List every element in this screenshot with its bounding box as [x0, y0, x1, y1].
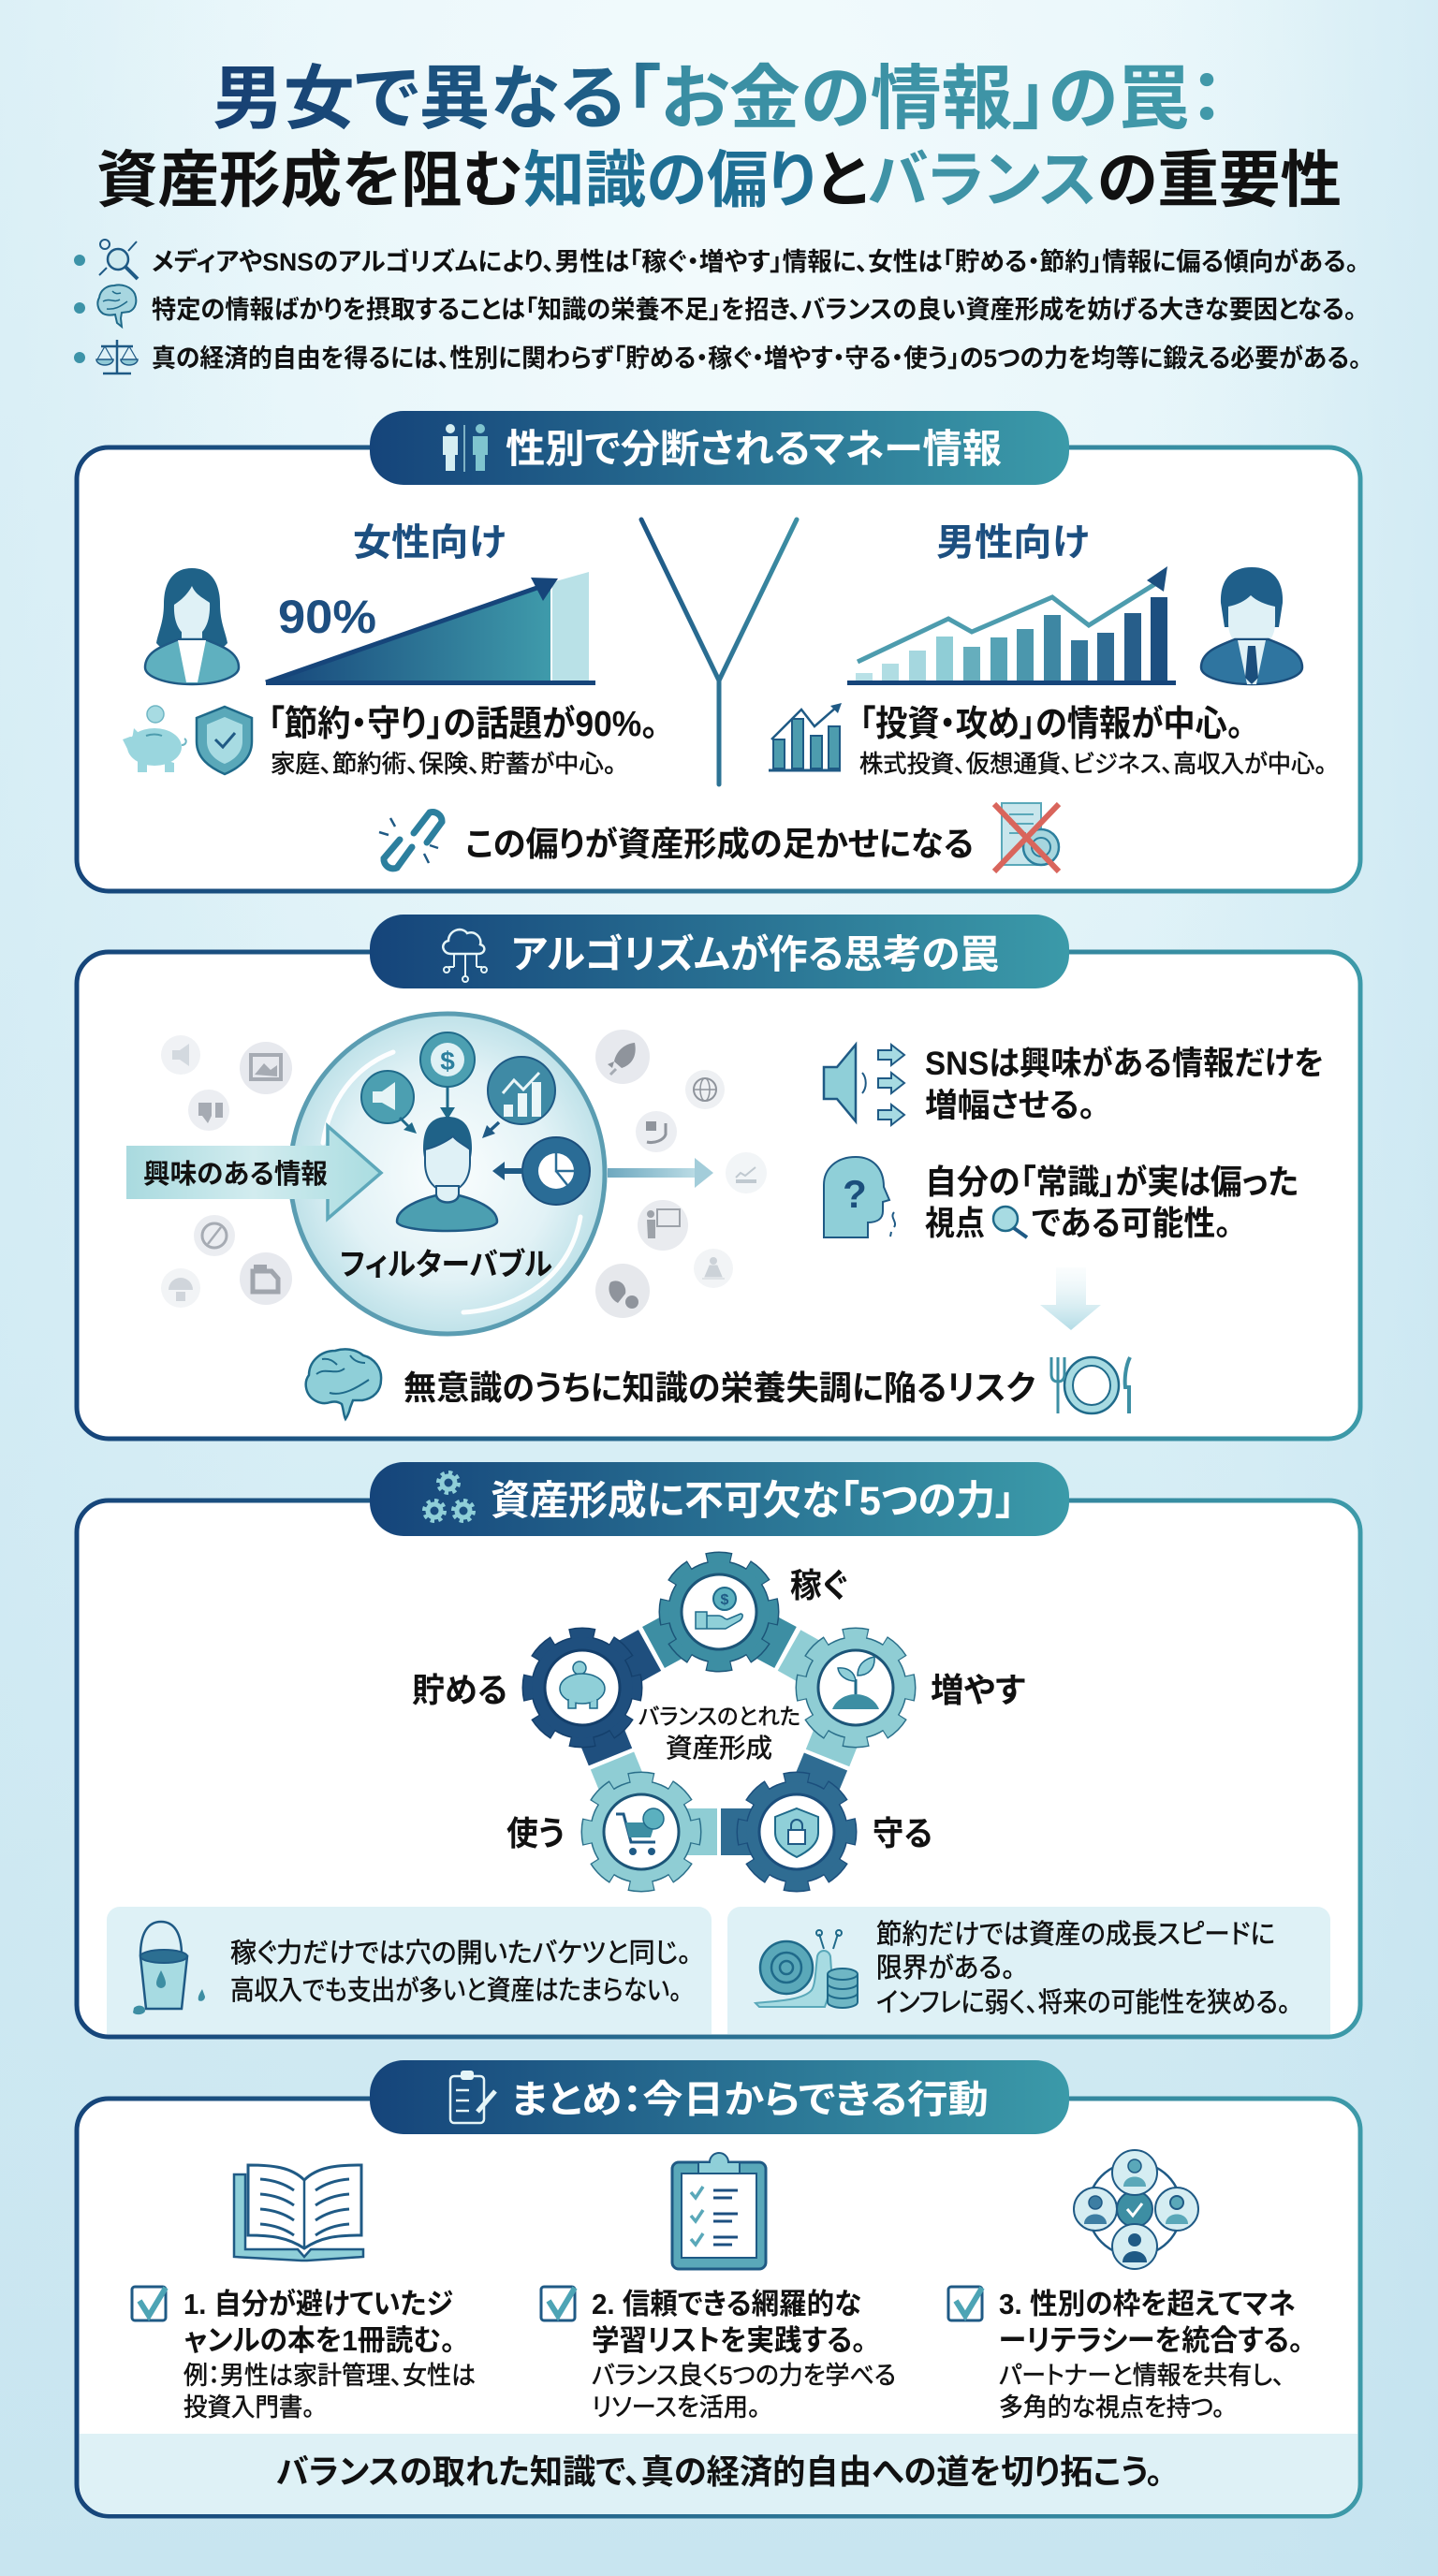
panel frame — [77, 447, 1360, 891]
title: 資産形成を阻む知識の偏りとバランスの重要性 — [96, 145, 1342, 214]
text: your common sense may be biased: 視点 — [925, 1204, 985, 1242]
icon: head with question mark: ? — [843, 1172, 867, 1216]
gear: earn: $ — [721, 1592, 729, 1608]
filter bubble — [126, 1014, 605, 1334]
gear connectors — [582, 1612, 856, 1832]
action 3: 多角的な視点を持つ。 — [999, 2393, 1225, 2422]
icon: snail with coins — [756, 1930, 858, 2008]
panel: algorithm thought trap — [77, 915, 1360, 1439]
section heading pill — [370, 915, 1069, 988]
label: protect: 守る — [873, 1814, 932, 1852]
arrow: interesting information in — [126, 1126, 381, 1219]
text: women headline and detail: 「節約・守り」の話題が90%。 — [268, 705, 658, 744]
section heading pill: アルゴリズムが作る思考の罠 — [511, 932, 999, 976]
text: SNS amplifies interests — [925, 1046, 1324, 1124]
callout: bias as shackle: この偏りが資産形成の足かせになる — [465, 825, 974, 863]
icon: head with question mark — [824, 1157, 895, 1237]
diagram: five interlocking gears — [412, 1559, 1025, 1884]
icon: leaky bucket — [133, 1922, 205, 2014]
icon: magnifier inline — [993, 1207, 1027, 1237]
band: closing message — [80, 2434, 1357, 2514]
icon: person in bubble — [397, 1117, 497, 1231]
icon: shield with check — [197, 707, 252, 774]
Y-shaped divider — [641, 520, 797, 784]
text: women headline and detail: 家庭、節約術、保険、貯蓄が中心。 — [271, 750, 616, 778]
icon: money bubble — [420, 1032, 475, 1120]
callout: risk of knowledge malnutrition: 無意識のうちに知識の栄養失調に陥るリスク — [404, 1368, 1035, 1407]
gear: grow — [803, 1635, 908, 1740]
section heading pill — [370, 2060, 1069, 2134]
gear: spend — [589, 1779, 694, 1884]
label: spend: 使う — [506, 1814, 565, 1852]
icon: plate and cutlery — [1051, 1357, 1130, 1413]
text: men headline and detail: 株式投資、仮想通貨、ビジネス、高収入が中心。 — [859, 750, 1327, 778]
band: closing message: バランスの取れた知識で、真の経済的自由への道を切り拓こう。 — [276, 2452, 1163, 2491]
action 2: 学習リストを実践する。 — [592, 2324, 866, 2357]
action 2: 2. 信頼できる網羅的な — [592, 2288, 861, 2320]
section heading pill: 性別で分断されるマネー情報 — [506, 427, 1002, 471]
section heading pill — [370, 1462, 1069, 1536]
text: your common sense may be biased — [925, 1163, 1299, 1242]
callout: snail savings — [727, 1907, 1330, 2034]
action 2 — [541, 2287, 896, 2422]
icon: checkbox — [948, 2287, 982, 2320]
text: SNS amplifies interests: SNSは興味がある情報だけを — [925, 1046, 1324, 1082]
callout: leaky bucket — [107, 1907, 712, 2034]
panel: summary actions — [77, 2060, 1360, 2516]
text: your common sense may be biased: である可能性。 — [1032, 1204, 1231, 1242]
arrow: outward — [608, 1158, 713, 1188]
bullet 3: scales icon and text: 真の経済的自由を得るには、性別に関わらず「貯める・稼ぐ・増やす・守る・使う」の5つの力を均等に鍛える必要がある。 — [152, 344, 1361, 373]
gear: earn — [667, 1559, 771, 1664]
callout: snail savings: 節約だけでは資産の成長スピードに — [876, 1919, 1275, 1950]
action 3: パートナーと情報を共有し、 — [999, 2362, 1284, 2390]
icon: pie chart bubble — [492, 1137, 590, 1205]
chart: 90 percent rising wedge — [266, 572, 595, 685]
text: SNS amplifies interests: 増幅させる。 — [925, 1088, 1095, 1124]
icon: crossed-out document and coins — [994, 803, 1059, 871]
panel: five powers for asset building — [77, 1462, 1360, 2037]
text: men headline and detail: 「投資・攻め」の情報が中心。 — [859, 705, 1243, 744]
action 3: 3. 性別の枠を超えてマネ — [999, 2288, 1296, 2320]
center label: balanced asset building: 資産形成 — [666, 1734, 772, 1763]
text: men headline and detail — [859, 705, 1327, 778]
icon: checkbox — [132, 2287, 166, 2320]
bullet 2: brain icon and text — [74, 285, 1357, 327]
icon: money bubble: $ — [440, 1046, 455, 1076]
gear: save — [530, 1635, 635, 1740]
action 1: 投資入門書。 — [183, 2393, 315, 2422]
callout: snail savings: 限界がある。 — [876, 1953, 1015, 1983]
icon: piggy bank — [123, 706, 186, 772]
label: save: 貯める — [412, 1671, 507, 1709]
text: women headline and detail — [268, 705, 658, 778]
callout: leaky bucket: 稼ぐ力だけでは穴の開いたバケツと同じ。 — [230, 1938, 691, 1969]
icon: woman — [145, 568, 239, 684]
panel frame — [77, 952, 1360, 1439]
section heading pill: 資産形成に不可欠な「5つの力」 — [491, 1479, 1015, 1524]
icon: clipboard checklist — [672, 2153, 766, 2269]
arrow: down — [1040, 1267, 1101, 1330]
callout: snail savings: インフレに弱く、将来の可能性を狭める。 — [876, 1987, 1290, 2018]
title — [96, 59, 1342, 214]
text: your common sense may be biased: 自分の「常識」が実は偏った — [925, 1163, 1299, 1201]
column heading: men: 男性向け — [936, 522, 1089, 564]
gear: protect — [744, 1779, 849, 1884]
icon: bar chart with arrow — [769, 703, 842, 770]
action 1 — [132, 2287, 476, 2422]
icon: chart bubble — [482, 1057, 555, 1138]
label: earn: 稼ぐ — [790, 1566, 847, 1604]
label: filter bubble: フィルターバブル — [340, 1247, 552, 1281]
bullet 2: brain icon and text: 特定の情報ばかりを摂取することは「知識の栄養不足」を招き、バランスの良い資産形成を妨げる大きな要因となる。 — [152, 296, 1357, 324]
panel frame — [77, 1500, 1360, 2037]
outside faded information icons — [161, 1030, 767, 1318]
icon: speaker amplifying — [824, 1045, 904, 1125]
icon: brain — [306, 1349, 381, 1419]
panel frame — [77, 2099, 1360, 2516]
action 1: 1. 自分が避けていたジ — [183, 2288, 453, 2320]
action 3 — [948, 2287, 1303, 2422]
icon: man — [1201, 567, 1302, 684]
title: 男女で異なる「お金の情報」の罠： — [213, 59, 1225, 138]
center label: balanced asset building — [638, 1705, 800, 1763]
icon: megaphone bubble — [361, 1071, 417, 1134]
column heading: women: 女性向け — [353, 522, 506, 564]
arrow: interesting information in: 興味のある情報 — [143, 1159, 328, 1190]
action 3: ーリテラシーを統合する。 — [999, 2324, 1303, 2357]
chart: 90 percent rising wedge: 90% — [278, 591, 376, 643]
icon: checkbox — [541, 2287, 575, 2320]
bullet 1: magnifier icon and text: メディアやSNSのアルゴリズムにより、男性は「稼ぐ・増やす」情報に、女性は「貯める・節約」情報に偏る傾向がある。 — [152, 247, 1358, 276]
label: grow: 増やす — [931, 1671, 1025, 1709]
action 1: ャンルの本を1冊読む。 — [183, 2324, 455, 2357]
center label: balanced asset building: バランスのとれた — [638, 1705, 800, 1730]
chart: rising bars and line — [847, 566, 1176, 685]
icon: people network — [1074, 2150, 1198, 2269]
section heading pill — [370, 411, 1069, 485]
icon: open book — [234, 2165, 363, 2261]
panel: gender divided money information — [77, 411, 1360, 891]
intro bullet list — [74, 240, 1361, 373]
section heading pill: まとめ：今日からできる行動 — [511, 2078, 989, 2121]
action 1: 例：男性は家計管理、女性は — [183, 2362, 476, 2390]
icon: broken chain — [379, 812, 442, 869]
bullet 1: magnifier icon and text — [74, 240, 1358, 279]
action 2: リソースを活用。 — [592, 2393, 760, 2422]
action 2: バランス良く5つの力を学べる — [592, 2362, 896, 2390]
callout: leaky bucket: 高収入でも支出が多いと資産はたまらない。 — [230, 1975, 682, 2006]
